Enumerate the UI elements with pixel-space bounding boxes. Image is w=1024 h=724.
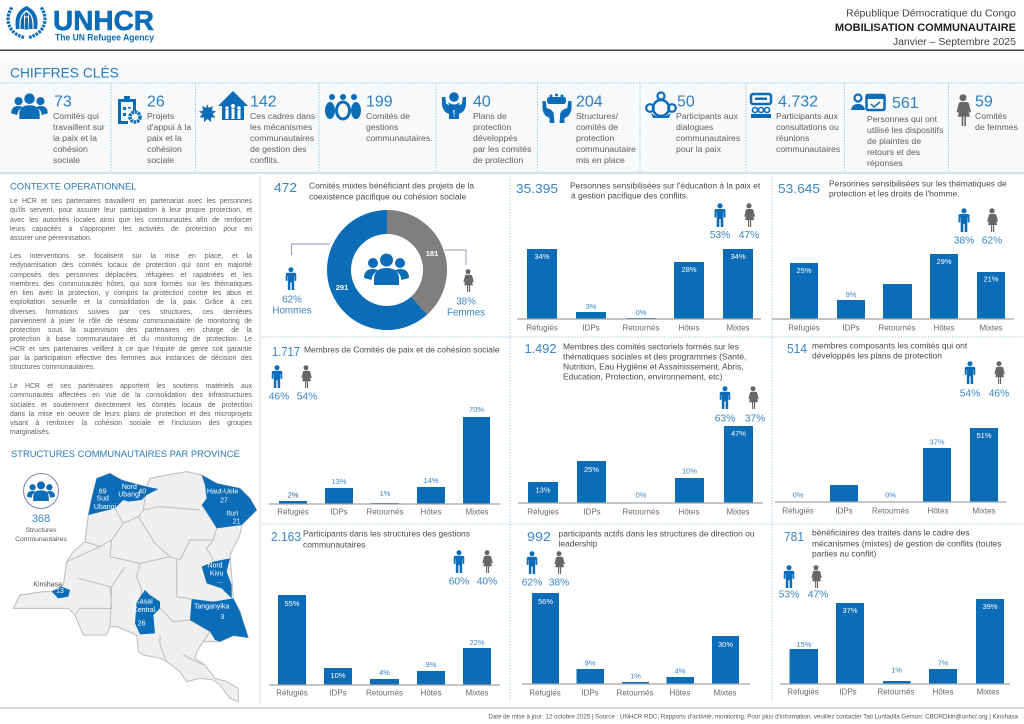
bar chart: Retournés — [879, 324, 915, 332]
bar chart — [775, 428, 1006, 516]
bar chart: Mixtes — [979, 324, 1003, 332]
bar chart: Réfugiés — [787, 688, 819, 696]
bar chart: 0% — [636, 308, 647, 317]
panel: 472 comités mixtes: Comités mixtes bénéficiant des projets de la — [309, 180, 474, 190]
kpi: 26 — [118, 94, 191, 165]
bar chart: Mixtes — [726, 508, 750, 516]
panel: 781: parties au conflit) — [812, 548, 876, 558]
bar chart: Réfugiés — [529, 688, 561, 698]
panel: 992: 38% — [549, 578, 569, 588]
panel: 35.395: Personnes sensibilisées sur l'éducation à la paix et — [570, 180, 761, 190]
bar chart: 28% — [681, 265, 697, 274]
bar chart — [269, 595, 500, 698]
map labels: Sud — [96, 496, 109, 503]
map labels: Haut-Uele — [207, 489, 238, 496]
panel: 1.717: 54% — [297, 392, 317, 402]
bar chart: IDPs — [330, 508, 348, 516]
bar chart: 37% — [929, 438, 945, 446]
kpi: 561: réponses — [867, 158, 903, 168]
bar chart: 10% — [330, 671, 346, 680]
heading: CHIFFRES CLÉS — [10, 64, 119, 80]
text block: contexte paragraph 3: sociales et soutiennent directement les comités locaux de protection — [10, 402, 252, 408]
province: Kasaï Central — [135, 590, 160, 634]
tagline: The UN Refugee Agency — [55, 32, 154, 42]
map labels: 40 — [138, 489, 146, 496]
kpi: 204: comités de — [576, 122, 618, 132]
text block: contexte paragraph 3: marginalisés. — [10, 429, 51, 436]
panel: 514: membres composants les comités qui ont — [812, 340, 968, 350]
text block: contexte paragraph 2: Les interventions se focalisent sur la mise en place, et la — [10, 253, 252, 260]
kpi: 204: communautaire — [576, 144, 636, 154]
map labels: Central — [133, 607, 156, 614]
kpi: 40: par les comités — [473, 144, 532, 154]
bar chart: Mixtes — [465, 508, 489, 516]
bar chart: Retournés — [872, 506, 909, 516]
kpi: 4.732: communautaires — [776, 144, 841, 154]
bar chart: Hôtes — [928, 506, 948, 516]
panel: 53.645: protection et les droits de l'homme. — [829, 188, 960, 198]
donut chart — [336, 222, 438, 318]
bar chart: Hôtes — [679, 324, 699, 332]
kpi: 26: 26 — [147, 94, 165, 110]
panel: 781: mécanismes (mixtes) de gestion de conflits (toutes — [812, 538, 1001, 548]
text block: contexte paragraph 1: assurer une pérennisation. — [10, 235, 92, 242]
panel: 1.717: Membres de Comités de paix et de cohésion sociale — [304, 344, 500, 354]
bar chart: 29% — [936, 257, 952, 266]
map labels: Ubangi — [118, 491, 141, 498]
bar chart — [518, 426, 763, 516]
map labels: Kivu — [210, 570, 224, 577]
bar chart: IDPs — [835, 506, 853, 516]
panel: 2.163: Participants dans les structures des gestions — [303, 528, 470, 538]
kpi: 73: la paix et la — [53, 133, 97, 143]
panel: 781 — [779, 528, 1010, 696]
panel: 2.163 — [269, 528, 500, 698]
bar chart: 3% — [586, 302, 597, 311]
logo: UNHCR — [8, 5, 154, 42]
bar chart: 4% — [675, 666, 686, 676]
bar chart: Mixtes — [976, 688, 1000, 696]
kpi: 50: 50 — [677, 94, 695, 110]
bar chart: 22% — [469, 638, 485, 647]
text block: contexte paragraph 2: membres des communautés hôtes, qui sont formés sur les thématiques — [10, 281, 252, 288]
text block: contexte paragraph 2: protection sous la supervision des partenaires en charge de la — [10, 327, 252, 334]
text block: contexte paragraph 2: parviennent à jouer le rôle de réseau communautaire de monitoring de — [10, 318, 252, 325]
panel: 992: 62% — [522, 578, 542, 588]
kpi: 40 — [442, 92, 532, 165]
bar chart: Retournés — [623, 508, 659, 516]
report title block: MOBILISATION COMMUNAUTAIRE — [835, 22, 1016, 34]
kpi: 73: cohésion — [53, 144, 88, 154]
kpi: 142: les mécanismes — [250, 122, 313, 132]
total structures: Structures — [26, 527, 57, 534]
kpi: 59 — [957, 94, 1019, 132]
kpi: 142 — [199, 91, 316, 165]
panel: 781: 781 — [784, 529, 804, 544]
bar chart: Retournés — [366, 688, 403, 698]
text block: contexte paragraph 3: communautés affectées en vue de la consolidation des infrastructures — [10, 392, 252, 399]
kpi: 204: Structures/ — [576, 111, 619, 121]
text block: contexte paragraph 1: leurs capacités à s'approprier les activités de protection pour en — [10, 226, 252, 233]
kpi: 50: Participants aux — [676, 111, 738, 121]
text block: contexte paragraph 2: structures communautaires. — [10, 364, 95, 371]
bar chart: 14% — [423, 476, 439, 485]
text block: contexte paragraph 2: composés des personnes déplacées, réfugiées et rapatriées et les — [10, 272, 252, 278]
kpi: 561: Personnes qui ont — [867, 114, 938, 124]
panel: 1.492: 37% — [745, 414, 765, 424]
bar chart: IDPs — [329, 688, 347, 698]
kpi: 59: de femmes — [975, 122, 1019, 132]
panel: chiffres clés — [0, 60, 1024, 174]
icon: UNHCR wreath and shelter — [8, 6, 45, 38]
panel: 992 — [522, 528, 755, 698]
panel: 1.492 — [518, 341, 765, 516]
left column divider — [259, 175, 261, 705]
kpi: 204 — [542, 94, 636, 165]
kpi: 561: de plaintes de — [867, 136, 921, 146]
donut chart: 181 — [426, 249, 438, 258]
kpi: 142: de gestion des — [250, 144, 307, 154]
kpi: 142: conflits. — [250, 155, 279, 165]
kpi: 73: sociale — [53, 155, 80, 165]
panel: 472 comités mixtes — [272, 180, 485, 318]
kpi: 50: communautaires — [676, 133, 741, 143]
bar chart: IDPs — [581, 688, 599, 698]
bar chart: IDPs — [839, 688, 857, 696]
bar chart: 34% — [730, 252, 746, 261]
bar chart: 39% — [982, 602, 998, 611]
text block: contexte paragraph 1: Le HCR et ses partenaires travaillent en partenariat avec les personnes — [10, 198, 252, 205]
panel: 53.645: 53.645 — [778, 181, 820, 196]
kpi: 4.732 — [751, 94, 841, 154]
text block: contexte paragraph 2: protection à base communautaire et du monitoring de protection. Le — [10, 336, 252, 343]
kpi: 59: Comités — [975, 111, 1008, 121]
bar chart: 1% — [891, 666, 902, 674]
panel: 514 — [775, 340, 1009, 516]
panel: 35.395 — [516, 180, 761, 332]
kpi: 50: pour la paix — [676, 144, 722, 154]
map labels: Kinshasa — [33, 581, 62, 588]
kpi: 4.732: Participants aux — [776, 111, 838, 121]
men callout: 62% — [282, 294, 302, 306]
panel: 35.395: à gestion pacifique des conflits. — [571, 190, 688, 200]
panel: 53.645: 38% — [954, 236, 974, 246]
map labels: 3 — [220, 614, 224, 621]
panel: 53.645 — [772, 178, 1014, 332]
kpi: 40: Plans de — [473, 111, 507, 121]
kpi: 142: 142 — [250, 94, 277, 110]
kpi: 73: travaillent sur — [53, 122, 105, 132]
bar chart: 15% — [796, 640, 812, 649]
kpi: 50 — [646, 92, 741, 154]
panel: 1.717 — [269, 344, 500, 516]
map labels: Ituri — [226, 510, 239, 517]
text block: contexte paragraph 2: en lien avec la protection, y compris la protection contre les abus et — [10, 290, 252, 297]
bar chart: 13% — [331, 477, 347, 486]
heading: contexte opérationnel: CONTEXTE OPERATIONNEL — [10, 180, 136, 192]
kpi: 40: de protection — [473, 155, 523, 165]
bar chart: 10% — [682, 466, 697, 476]
text block: contexte paragraph 2: par la participation effective des femmes aux instances de décision des — [10, 355, 252, 362]
kpi: 26: paix et la — [147, 133, 182, 143]
kpi: 26: sociale — [147, 155, 174, 165]
total structures: 368 — [32, 513, 50, 525]
text block: contexte paragraph 2: diverses formations suivies par ces structures, ces dernières — [10, 308, 252, 316]
kpi: 26: d'appui à la — [147, 122, 191, 132]
map labels: 26 — [138, 621, 146, 628]
text block: contexte paragraph 1 — [10, 198, 252, 242]
text block: contexte paragraph 2: exploitation sexuelle et la consolidation de la paix. Grâce à ces — [10, 299, 252, 306]
province: Sud-Ubangi et Nord-Ubangi — [88, 473, 158, 515]
panel: 472 comités mixtes: 472 — [274, 180, 297, 195]
kpi: 40: 40 — [473, 94, 491, 110]
panel: 781: 53% — [779, 590, 799, 600]
kpi: 26: Projets — [147, 111, 175, 121]
panel: 781: bénéficiaires des traites dans le cadre des — [812, 528, 970, 538]
bar chart: 25% — [796, 266, 812, 275]
bar chart: 13% — [535, 486, 551, 494]
kpi: 40: développés — [473, 133, 518, 143]
bar chart: 9% — [585, 658, 596, 668]
panel: 992: leadership — [558, 538, 598, 548]
kpi: 26: cohésion — [147, 144, 182, 154]
women callout — [445, 250, 485, 318]
kpi: 561 — [851, 94, 944, 168]
bar chart: 55% — [284, 599, 300, 608]
panel: 53.645: Personnes sensibilisées sur les thématiques de — [829, 178, 1007, 188]
text block: contexte paragraph 3: dans la mise en oeuvre de leurs plans de protection et des microprojets — [10, 411, 252, 418]
bar chart: Retournés — [617, 688, 653, 698]
kpi: 561: utilisé les dispositifs — [867, 125, 944, 135]
bar chart: 70% — [469, 405, 484, 414]
panel: 2.163: 60% — [449, 576, 469, 588]
bar chart: Mixtes — [972, 506, 996, 516]
map labels: Nord — [207, 563, 223, 570]
bar chart: Hôtes — [933, 688, 953, 696]
bar chart: 1% — [630, 672, 641, 680]
bar chart: IDPs — [582, 324, 600, 332]
panel: 514: 514 — [787, 341, 807, 356]
map labels: 21 — [233, 519, 241, 526]
map labels: 13 — [56, 588, 64, 595]
panel: 35.395: 53% — [710, 230, 730, 241]
bar chart: 0% — [793, 490, 804, 500]
bar chart: Réfugiés — [788, 324, 820, 332]
bar chart: 47% — [731, 429, 746, 438]
kpi: 59: 59 — [975, 94, 993, 110]
kpi: 4.732: réunions — [776, 133, 810, 143]
men callout — [272, 244, 330, 316]
bar chart: Hôtes — [670, 688, 690, 698]
map labels — [33, 484, 241, 628]
bar chart: 9% — [846, 290, 857, 299]
panel: 514: 46% — [989, 388, 1009, 400]
donut chart: 291 — [336, 283, 348, 292]
kpi: 199: gestions — [366, 122, 399, 132]
women callout: 38% — [456, 296, 476, 308]
bar chart: 4% — [379, 668, 390, 677]
kpi: 561: retours et des — [867, 147, 921, 157]
kpi: 142: communautaires — [250, 133, 315, 143]
kpi: 199: Comités de — [366, 111, 410, 121]
bar chart: Hôtes — [934, 324, 954, 332]
panel: 1.492: 1.492 — [524, 341, 556, 356]
panel: 35.395: 35.395 — [516, 181, 558, 196]
total structures: Communautaires — [15, 536, 67, 543]
panel: 2.163: 40% — [477, 576, 497, 588]
bar chart: Mixtes — [465, 688, 489, 698]
bar chart: Réfugiés — [782, 506, 814, 516]
panel: 1.492: Membres des comités sectoriels formés sur les — [563, 342, 739, 352]
map labels: ... — [217, 578, 223, 585]
bar chart — [772, 254, 1014, 332]
kpi: 204: mis en place — [576, 155, 625, 165]
kpi: 204: 204 — [576, 94, 603, 110]
bar chart: IDPs — [842, 324, 860, 332]
bar chart — [517, 249, 761, 332]
bar chart: 2% — [288, 490, 299, 500]
panel: 514: développés les plans de protection — [812, 350, 942, 360]
bar chart: 25% — [584, 465, 599, 474]
footer source note: Date de mise à jour: 12 octobre 2025 | Source : UNHCR RDC, Rapports d'activité, monitoring. Pour plus d'information, veuillez contacter Tati Luntadila Gerson: CBORDkin@unhcr.org | Kinshasa — [488, 714, 1019, 720]
kpi: 199: 199 — [366, 94, 393, 110]
bar chart: Mixtes — [713, 688, 737, 698]
bar chart: Retournés — [623, 324, 659, 332]
province: Haut-Uele et Ituri — [202, 475, 257, 528]
map: structures par province — [13, 472, 257, 702]
bar chart — [269, 405, 500, 516]
kpi: 73: 73 — [54, 94, 72, 110]
panel: 2.163: 2.163 — [271, 529, 301, 544]
kpi: 199 — [325, 94, 433, 143]
map labels: 69 — [99, 488, 107, 495]
text block: contexte paragraph 1: avec les autorités locales ainsi que les communautés afin de renforcer — [10, 216, 252, 224]
panel: 1.492: 63% — [715, 414, 735, 424]
bar chart: Réfugiés — [276, 688, 308, 698]
panel: 1.492: Education, Protection, environnement, etc) — [563, 372, 723, 382]
panel: 992: 992 — [527, 529, 551, 544]
text block: contexte paragraph 2 — [10, 252, 252, 371]
kpi: 73 — [11, 93, 105, 165]
kpi: 50: dialogues — [676, 122, 714, 132]
map labels: Kasaï — [135, 599, 153, 606]
text block: contexte paragraph 3 — [10, 382, 252, 436]
text block: contexte paragraph 2: HCR et ses partenaires veillent à ce que l'équité de genre soit garantie — [10, 346, 252, 352]
panel: 1.492: thématiques sociales et des programmes (Santé, — [563, 352, 746, 362]
bar chart: 34% — [534, 252, 550, 261]
kpi: 4.732: 4.732 — [778, 94, 818, 110]
bar chart: 0% — [636, 490, 647, 500]
province: Tanganyika — [190, 598, 248, 642]
report title block: Janvier – Septembre 2025 — [893, 36, 1016, 48]
panel: 472 comités mixtes: coexistence pacifique ou cohésion sociale — [309, 192, 466, 202]
total structures — [15, 474, 67, 543]
bar chart: 1% — [380, 489, 391, 498]
bar chart: 21% — [983, 274, 999, 284]
kpi: 204: protection — [576, 133, 614, 143]
bar chart: 56% — [538, 597, 553, 606]
bar chart: Retournés — [878, 688, 914, 696]
province: Nord-Kivu — [202, 558, 232, 598]
bar chart: 37% — [842, 606, 858, 615]
panel: 35.395: 47% — [739, 230, 759, 241]
bar chart: 51% — [976, 431, 992, 440]
kpi: 4.732: consultations ou — [776, 122, 839, 132]
UNHCR wordmark: UNHCR — [53, 5, 154, 36]
heading: structures par province: STRUCTURES COMMUNAUTAIRES PAR PROVINCE — [11, 448, 240, 459]
bar chart: 9% — [426, 660, 437, 669]
panel: 781: 47% — [808, 590, 828, 600]
text block: contexte paragraph 2: redynamisation des comités locaux de protection qui sont en majorité — [10, 262, 252, 269]
panel: 2.163: communautaires — [303, 540, 365, 550]
panel: 992: participants actifs dans les structures de direction ou — [558, 528, 755, 538]
bar chart: Réfugiés — [526, 324, 558, 332]
bar chart — [780, 599, 1010, 696]
panel: 1.717: 1.717 — [272, 344, 300, 359]
kpi: 561: 561 — [892, 95, 919, 112]
bar chart: 0% — [885, 490, 896, 500]
women callout: Femmes — [447, 308, 485, 318]
report title block: République Démocratique du Congo — [846, 8, 1016, 20]
bar chart: Hôtes — [421, 688, 441, 698]
panel: 1.492: Nutrition, Eau Hygiène et Assainissement, Abris, — [563, 362, 744, 372]
report title block — [835, 8, 1016, 48]
map labels: Nord — [122, 484, 137, 491]
bar chart: Retournés — [367, 508, 403, 516]
bar chart: Hôtes — [421, 508, 441, 516]
text block: contexte paragraph 1: qu'ils servent, pour assurer leur participation à leur propre protection, et — [10, 207, 252, 214]
kpi: 199: communautaires. — [366, 133, 433, 143]
map labels: Tanganyika — [194, 604, 229, 611]
bar chart: Réfugiés — [277, 508, 309, 516]
bar chart: Hôtes — [679, 508, 699, 516]
province: Kinshasa — [52, 587, 70, 598]
text block: contexte paragraph 3: visant à renforcer la cohésion sociale et l'inclusion des groupes — [10, 420, 252, 427]
panel: 1.717: 46% — [269, 392, 289, 402]
panel: 53.645: 62% — [982, 236, 1002, 246]
map labels: Ubangi — [94, 504, 117, 511]
bar chart: Réfugiés — [527, 508, 559, 516]
bar chart: Mixtes — [726, 324, 750, 332]
kpi: 73: Comités qui — [53, 111, 99, 121]
map labels: 27 — [220, 497, 228, 504]
kpi: 142: Ces cadres dans — [250, 111, 316, 121]
panel: 514: 54% — [960, 388, 980, 400]
men callout: Hommes — [272, 306, 312, 316]
bar chart: 7% — [938, 658, 949, 668]
kpi: 40: protection — [473, 122, 511, 132]
text block: contexte paragraph 3: Le HCR et ses partenaires apportent les soutiens matériels aux — [10, 383, 252, 390]
bar chart: 30% — [718, 640, 733, 649]
bar chart — [522, 593, 750, 698]
bar chart: IDPs — [583, 508, 601, 516]
